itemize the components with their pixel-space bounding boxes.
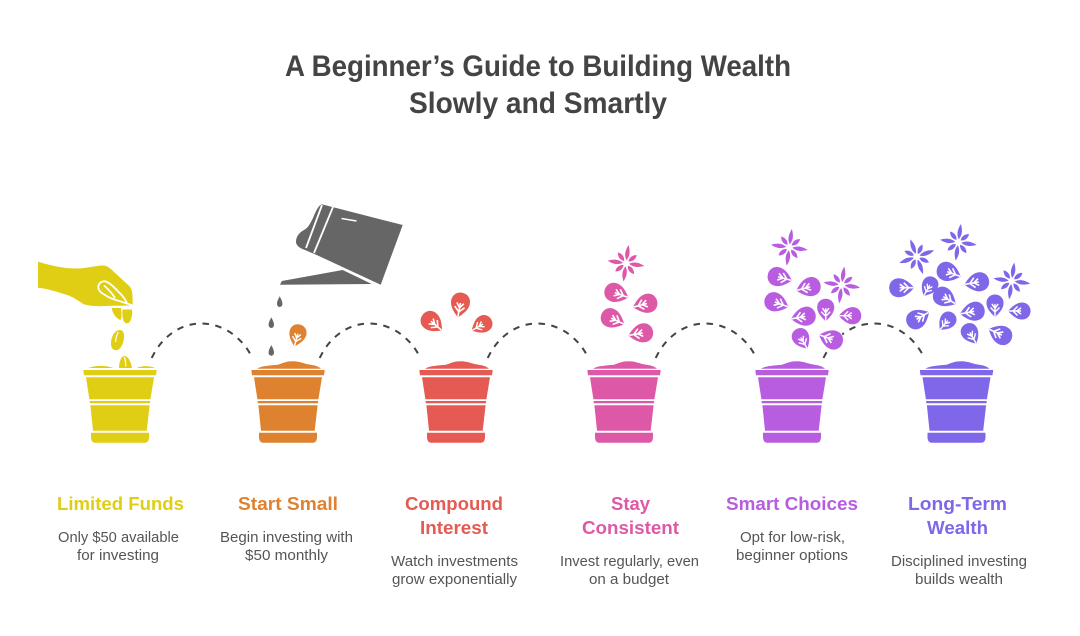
label: compound interest: Compound xyxy=(405,493,503,514)
label: long-term wealth: Disciplined investing xyxy=(891,554,1027,570)
icon: hand dropping seeds xyxy=(38,262,133,323)
label: stay consistent: Stay xyxy=(611,493,651,514)
step 5: smart choices illustration xyxy=(755,226,863,443)
step 1: limited funds illustration xyxy=(38,262,157,443)
label: compound interest: grow exponentially xyxy=(392,572,518,588)
label: smart choices: beginner options xyxy=(736,548,848,564)
pot xyxy=(587,370,661,443)
step 2: start small illustration xyxy=(251,204,403,443)
label: compound interest: Watch investments xyxy=(391,554,518,570)
flower xyxy=(605,242,647,284)
flowers xyxy=(768,226,863,306)
pot xyxy=(920,370,993,443)
icon: sprout leaf xyxy=(286,322,308,349)
icon: water drops xyxy=(269,296,282,356)
icon: falling seed xyxy=(111,330,124,350)
label: stay consistent: Invest regularly, even xyxy=(560,554,699,570)
label: stay consistent: Consistent xyxy=(582,517,679,538)
label: smart choices xyxy=(726,493,858,564)
label: limited funds xyxy=(57,493,184,564)
label: limited funds: for investing xyxy=(77,548,159,564)
title: A Beginner’s Guide to Building Wealth xyxy=(285,50,791,83)
label: long-term wealth xyxy=(891,493,1027,588)
soil xyxy=(761,361,825,369)
label: compound interest xyxy=(391,493,518,588)
dashed arc connector 3 xyxy=(488,324,588,358)
step 3: compound interest illustration xyxy=(417,291,496,443)
label: long-term wealth: Long-Term xyxy=(908,493,1007,514)
pot xyxy=(251,370,325,443)
label: compound interest: Interest xyxy=(420,517,488,538)
label: start small: Start Small xyxy=(238,493,338,514)
label: long-term wealth: Wealth xyxy=(927,517,988,538)
soil xyxy=(926,361,990,369)
pot xyxy=(419,370,493,443)
label: start small: $50 monthly xyxy=(245,548,329,564)
title: Slowly and Smartly xyxy=(409,87,667,120)
label: stay consistent xyxy=(560,493,699,588)
title xyxy=(285,50,791,120)
leaves xyxy=(417,291,496,338)
icon: seed entering pot xyxy=(119,356,132,368)
label: stay consistent: on a budget xyxy=(589,572,669,588)
label: limited funds: Only $50 available xyxy=(58,530,179,546)
label: long-term wealth: builds wealth xyxy=(915,572,1003,588)
soil xyxy=(593,361,657,369)
leaves xyxy=(889,259,1031,348)
soil xyxy=(257,361,321,369)
pot xyxy=(83,370,157,443)
pot xyxy=(755,370,829,443)
dashed arc connector 5 xyxy=(824,324,924,358)
label: start small xyxy=(220,493,353,564)
label: smart choices: Opt for low-risk, xyxy=(740,530,845,546)
step 6: long-term wealth illustration xyxy=(889,221,1033,443)
dashed arc connector 1 xyxy=(152,324,252,358)
soil xyxy=(425,361,489,369)
soil bumps xyxy=(88,366,113,368)
dashed arc connector 2 xyxy=(320,324,420,358)
label: start small: Begin investing with xyxy=(220,530,353,546)
leaves xyxy=(762,265,861,353)
flowers xyxy=(893,221,1033,302)
label: limited funds: Limited Funds xyxy=(57,493,184,514)
leaves xyxy=(598,280,660,345)
icon: watering can xyxy=(280,204,403,285)
dashed arc connector 4 xyxy=(656,324,756,358)
label: smart choices: Smart Choices xyxy=(726,493,858,514)
step 4: stay consistent illustration xyxy=(587,242,661,443)
